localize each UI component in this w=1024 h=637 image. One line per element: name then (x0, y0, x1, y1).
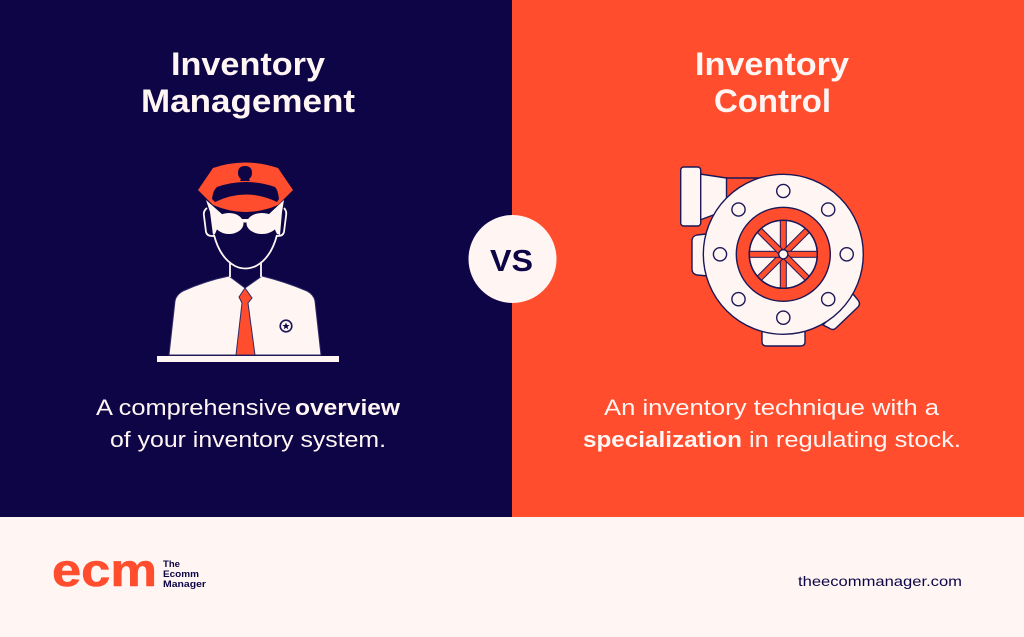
logo tagline: The (163, 559, 180, 570)
cap band (212, 182, 279, 202)
text: control description: specialization (583, 427, 742, 452)
text: management description: A comprehensive (96, 395, 291, 420)
ears (204, 208, 286, 236)
logo tagline (163, 559, 206, 590)
panel: footer background (0, 517, 1024, 637)
text: control description: An inventory technique with a (604, 395, 940, 420)
website url: theecommanager.com (798, 573, 962, 589)
icon: security officer (157, 162, 339, 362)
hub (779, 250, 788, 259)
inlet flange (681, 167, 701, 226)
badge (280, 320, 292, 332)
desk (157, 356, 339, 362)
cap badge (238, 166, 252, 181)
tie (236, 288, 255, 355)
neck (230, 263, 261, 277)
housing (703, 174, 863, 334)
logo tagline: Manager (163, 579, 206, 590)
ring (736, 207, 830, 301)
face sides (206, 200, 284, 235)
spokes (750, 220, 817, 288)
heading: inventory control (695, 46, 849, 119)
heading: inventory management: Management (141, 83, 355, 119)
text: control description: in regulating stock. (749, 427, 961, 452)
connector (726, 178, 765, 200)
text: management description: overview (295, 395, 401, 420)
body (169, 276, 321, 355)
heading: inventory management: Inventory (171, 46, 325, 82)
text: management description (96, 395, 401, 452)
face outline (214, 235, 277, 268)
bottom foot (762, 330, 805, 346)
heading: inventory control: Inventory (695, 46, 849, 82)
panel: inventory management (0, 0, 512, 517)
panel: inventory control (512, 0, 1024, 517)
text: control description (583, 395, 961, 452)
heading: inventory management (141, 46, 355, 119)
side box (692, 234, 708, 276)
logo tagline: Ecomm (163, 569, 199, 580)
logo: ecm: ecm (52, 544, 157, 596)
vs badge: VS (490, 243, 533, 278)
vs badge (468, 215, 556, 303)
wheel (749, 220, 817, 288)
cap (198, 162, 293, 212)
icon: turbocharger (681, 167, 863, 346)
bolts (713, 184, 853, 324)
diagonal foot (823, 294, 860, 330)
text: management description: of your inventory system. (110, 427, 386, 452)
heading: inventory control: Control (714, 83, 831, 119)
logo: ecm (52, 544, 206, 596)
sunglasses (214, 213, 278, 234)
